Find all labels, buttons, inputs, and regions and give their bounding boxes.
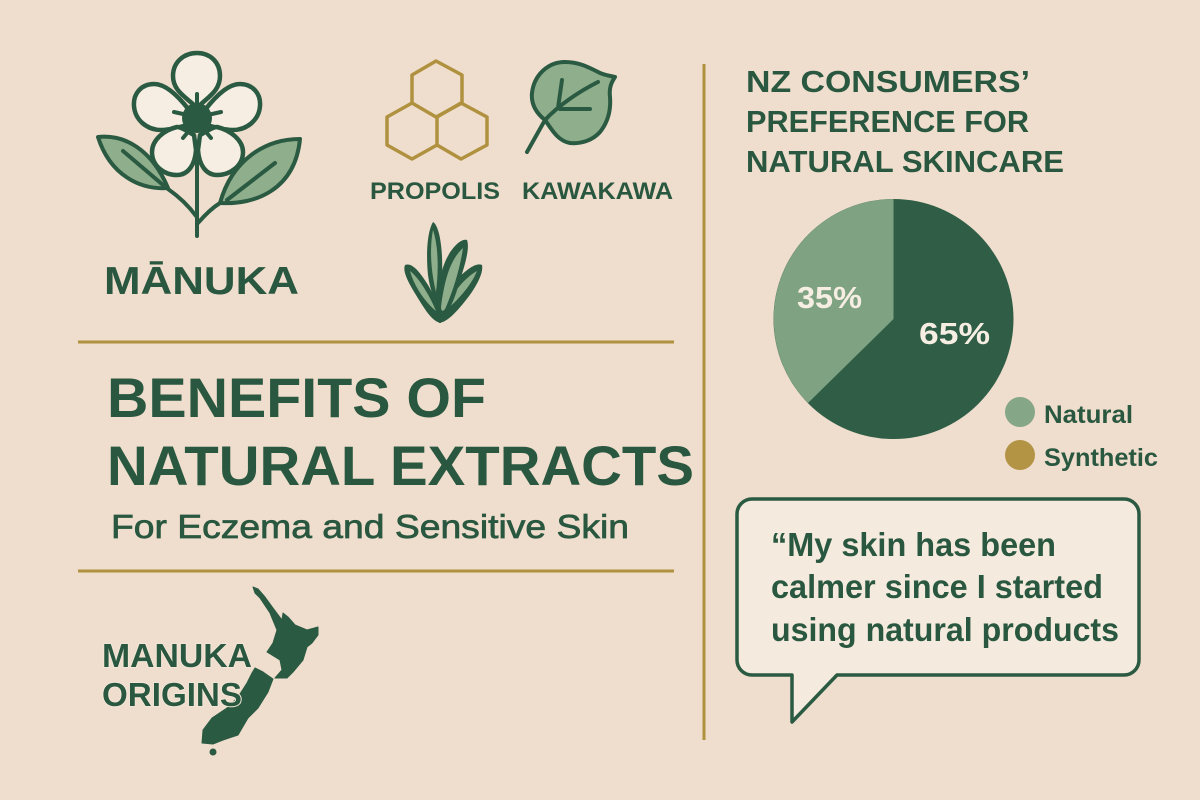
- label: Manuka: MĀNUKA: [104, 260, 299, 303]
- legend: Natural: [1044, 401, 1133, 429]
- callout: testimonial speech bubble: using natural products: [771, 611, 1119, 648]
- pie chart: 65%: [919, 316, 990, 351]
- chart heading: PREFERENCE FOR: [746, 105, 1029, 139]
- icon: manuka flower: [98, 53, 300, 236]
- subtitle: For Eczema and Sensitive Skin: [111, 508, 629, 545]
- icon: grass plant: [404, 222, 482, 323]
- label: Propolis: PROPOLIS: [370, 178, 500, 205]
- label: Manuka origins: ORIGINS: [102, 676, 242, 713]
- legend: Synthetic: [1044, 444, 1158, 472]
- callout: testimonial speech bubble: calmer since I started: [771, 568, 1103, 605]
- legend: [1005, 397, 1158, 472]
- chart heading: NZ CONSUMERS’: [746, 65, 1030, 99]
- map: New Zealand: [202, 587, 318, 755]
- chart heading: NATURAL SKINCARE: [746, 145, 1064, 179]
- label: Kawakawa: KAWAKAWA: [522, 178, 673, 205]
- label: Manuka origins: [102, 637, 252, 713]
- callout: testimonial speech bubble: “My skin has been: [771, 526, 1056, 563]
- callout: testimonial speech bubble: [737, 499, 1139, 722]
- icon: kawakawa leaf: [527, 62, 615, 152]
- pie chart: [774, 199, 1014, 439]
- title: [107, 366, 694, 497]
- icon: propolis honeycomb: [387, 61, 487, 159]
- title: BENEFITS OF: [107, 366, 486, 429]
- title: NATURAL EXTRACTS: [107, 434, 694, 497]
- pie chart: 35%: [797, 280, 862, 315]
- chart heading: [746, 65, 1064, 179]
- label: Manuka origins: MANUKA: [102, 637, 252, 674]
